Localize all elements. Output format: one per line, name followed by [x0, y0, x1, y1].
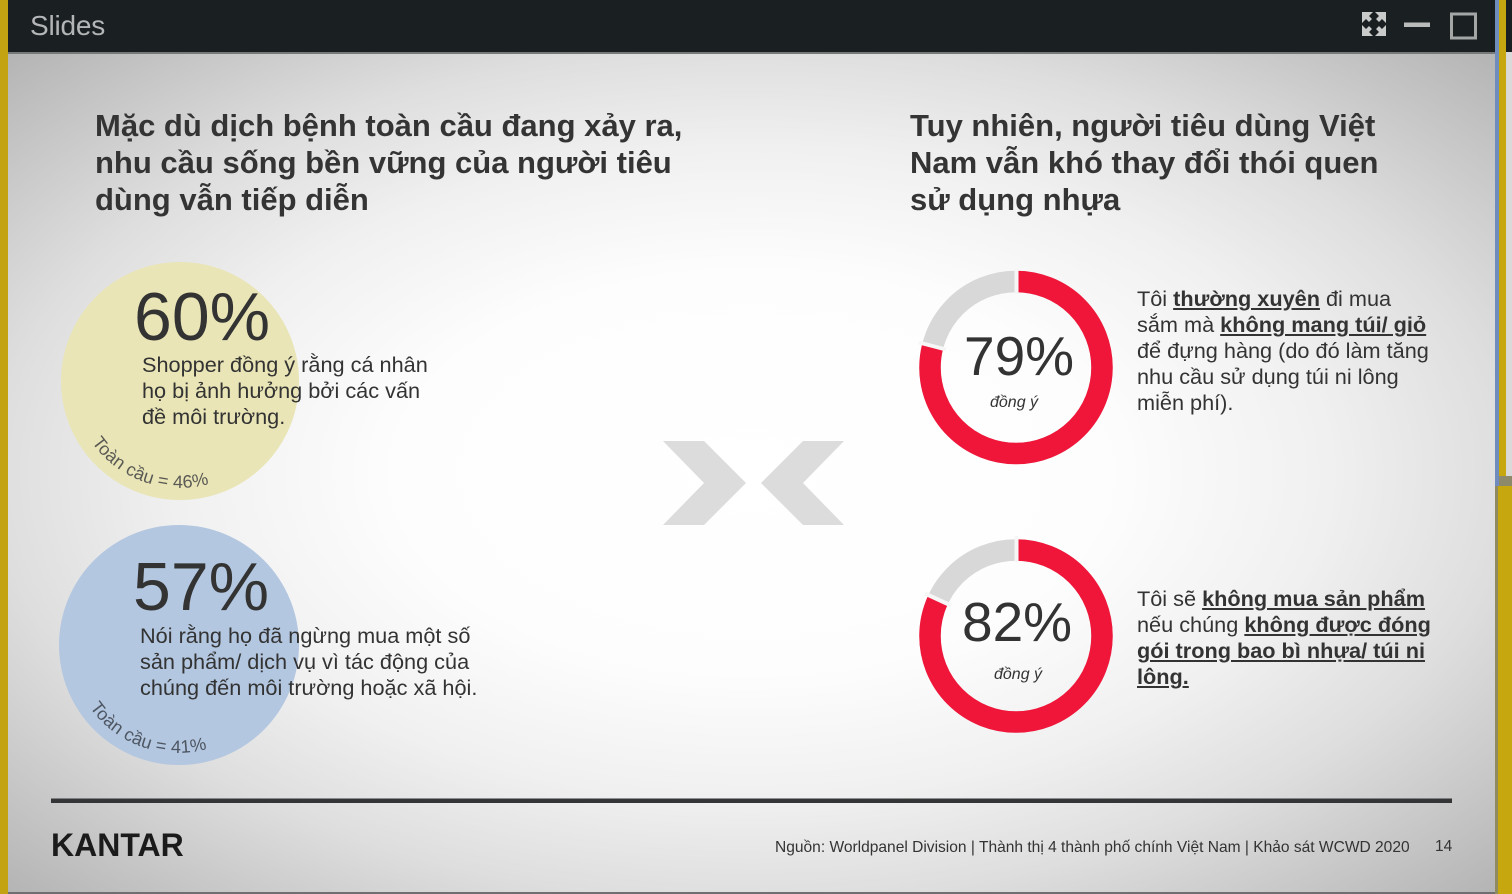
icon: minimise	[1404, 22, 1430, 27]
right window frame edge	[1495, 0, 1512, 894]
donut statement: 79%: nhu cầu sử dụng túi ni lông	[1137, 364, 1399, 389]
window icons	[1362, 12, 1477, 40]
stat text: 60%: Shopper đồng ý rằng cá nhân	[142, 352, 428, 377]
stat text: 57%: chúng đến môi trường hoặc xã hội.	[140, 675, 477, 700]
heading: right	[910, 108, 1378, 217]
header bar	[8, 0, 1495, 54]
donut number: 79%: 79%	[964, 325, 1074, 387]
stat text: 57%: sản phẩm/ dịch vụ vì tác động của	[140, 649, 469, 674]
icon: converging chevrons	[663, 441, 844, 525]
donut statement: 82%: nếu chúng không được đóng	[1137, 612, 1431, 637]
heading: right: sử dụng nhựa	[910, 182, 1120, 217]
icon: fullscreen	[1362, 12, 1386, 36]
heading: right: Nam vẫn khó thay đổi thói quen	[910, 145, 1378, 180]
heading: left: dùng vẫn tiếp diễn	[95, 182, 369, 217]
left window frame edge	[0, 0, 8, 894]
heading: right: Tuy nhiên, người tiêu dùng Việt	[910, 108, 1375, 143]
donut statement: 79%: Tôi thường xuyên đi mua	[1137, 286, 1391, 311]
stat number: 60%: 60%	[134, 279, 270, 355]
donut statement: 82%: Tôi sẽ không mua sản phẩm	[1137, 586, 1425, 611]
header title: Slides	[30, 10, 105, 41]
stat text: 60%: đề môi trường.	[142, 404, 285, 429]
icon: maximise	[1452, 14, 1476, 38]
heading: left: Mặc dù dịch bệnh toàn cầu đang xảy ra,	[95, 108, 682, 143]
lower frame shadow	[1495, 486, 1498, 894]
blue window border	[1495, 0, 1499, 486]
donut statement: 79%: để đựng hàng (do đó làm tăng	[1137, 338, 1429, 363]
circle: blue stat	[59, 525, 299, 765]
logo: KANTAR: KANTAR	[51, 827, 184, 863]
donut statement: 79%	[1137, 286, 1429, 415]
donut statement: 82%	[1137, 586, 1431, 689]
stat text: 57%	[140, 623, 477, 700]
donut: 82%	[925, 536, 1102, 722]
donut caption: agree: đồng ý	[994, 666, 1042, 683]
stat text: 60%: họ bị ảnh hưởng bởi các vấn	[142, 378, 420, 403]
donut statement: 79%: sắm mà không mang túi/ giỏ	[1137, 312, 1426, 337]
stat text: 57%: Nói rằng họ đã ngừng mua một số	[140, 623, 470, 648]
donut caption: agree: đồng ý	[990, 394, 1038, 411]
stat text: 60%	[142, 352, 428, 429]
curved label: global 41%: Toàn cầu = 41%	[92, 700, 206, 753]
top right corner strip	[1506, 0, 1512, 52]
page number: 14	[1435, 838, 1452, 855]
stat number: 57%: 57%	[133, 549, 269, 625]
donut statement: 82%: lông.	[1137, 664, 1189, 689]
curved label: global 46%: Toàn cầu = 46%	[94, 435, 208, 488]
donut statement: 82%: gói trong bao bì nhựa/ túi ni	[1137, 638, 1425, 663]
circle: yellow stat	[61, 262, 299, 500]
heading: left: nhu cầu sống bền vững của người tiêu	[95, 145, 672, 180]
neighbouring window lower edge	[1499, 476, 1512, 486]
donut number: 82%: 82%	[962, 591, 1072, 653]
neighbouring window strip	[1506, 52, 1512, 476]
bottom window edge	[8, 892, 1495, 894]
divider line	[51, 798, 1452, 803]
heading: left	[95, 108, 682, 217]
donut statement: 79%: miễn phí).	[1137, 390, 1233, 415]
donut: 79%	[919, 268, 1102, 454]
source note: Nguồn: Worldpanel Division | Thành thị 4 thành phố chính Việt Nam | Khảo sát WCWD 2020	[775, 839, 1410, 856]
